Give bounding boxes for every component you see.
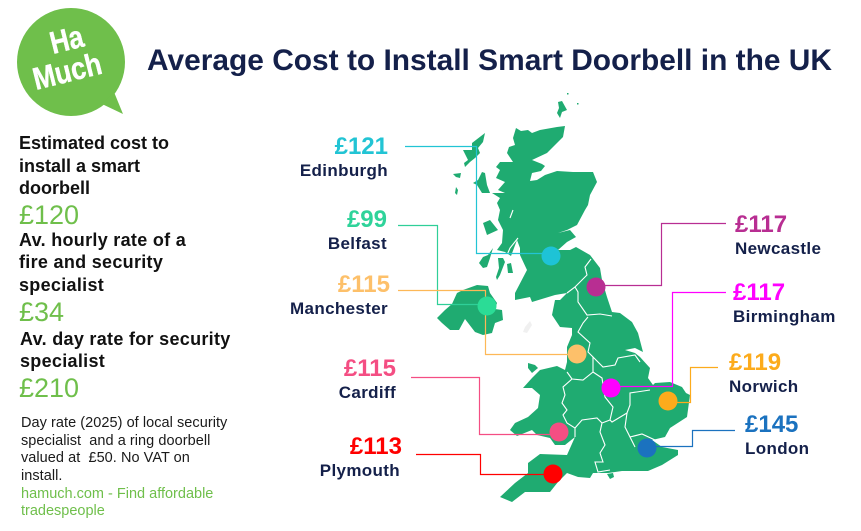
map: Northern Ireland [437,285,503,335]
text: footnote: valued at £50. No VAT on [21,450,190,466]
text: day rate value: £210 [19,373,79,403]
text: footnote: Day rate (2025) of local security [21,415,227,431]
label: Newcastle: £117 [735,211,787,238]
connector: London [652,430,735,446]
panel: cost summary [19,133,231,519]
label: Birmingham [733,279,836,326]
connector: Belfast [398,226,482,304]
text: hourly rate heading: Av. hourly rate of a [19,230,186,250]
text: footnote: specialist and a ring doorbell [21,433,210,449]
text: day rate heading: Av. day rate for security [20,329,231,349]
label: Newcastle: Newcastle [735,239,821,258]
label: Birmingham: £117 [733,279,785,306]
label: Edinburgh: £121 [335,133,388,160]
connector: Newcastle [600,224,726,286]
label: Norwich: £119 [729,349,781,376]
connector: Norwich [672,368,718,402]
logo: HaMuch speech bubble: Ha [46,19,88,61]
text: hourly rate value: £34 [19,297,64,327]
map: Great Britain landmass [492,126,690,502]
label: London: £145 [745,411,798,438]
label: Manchester [290,271,390,318]
label: Cardiff [339,355,396,402]
marker: Newcastle [586,278,606,296]
label: London [745,411,809,458]
connector: Plymouth [416,454,548,474]
label: Cardiff: Cardiff [339,383,396,402]
map: Scottish islands [453,93,614,479]
label: Belfast: Belfast [328,234,387,253]
text: estimated cost heading: install a smart [19,156,140,176]
marker: Norwich [658,392,678,410]
marker: Cardiff [550,422,568,442]
connector: Edinburgh [405,146,545,254]
label: Edinburgh: Edinburgh [300,161,388,180]
marker: Belfast [478,296,496,316]
label: Plymouth [320,433,402,480]
map: Anglesey [528,363,538,373]
label: Manchester: £115 [338,271,390,298]
connector: Birmingham [616,292,726,386]
label: Norwich: Norwich [729,377,799,396]
marker: Edinburgh [542,246,560,266]
text: estimated cost heading: Estimated cost to [19,133,169,153]
label: Manchester: Manchester [290,299,388,318]
label: London: London [745,439,809,458]
map: United Kingdom regions [437,93,690,502]
marker: London [638,438,656,458]
label: Birmingham: Birmingham [733,307,836,326]
marker: Plymouth [544,464,562,484]
marker: Manchester [568,344,586,364]
title: Average Cost to Install Smart Doorbell in the UK [147,44,832,77]
label: Plymouth: £113 [350,433,402,460]
connector: Manchester [398,290,570,354]
label: Belfast: £99 [347,206,387,233]
text: day rate heading: specialist [20,351,105,371]
text: estimated cost value: £120 [19,200,79,230]
marker: Birmingham [602,378,620,398]
label: Edinburgh [300,133,388,180]
text: website link: hamuch.com - Find affordable [21,486,213,502]
text: website link: tradespeople [21,503,105,519]
text: footnote: install. [21,468,62,484]
text: hourly rate heading: specialist [19,275,104,295]
label: Newcastle [735,211,821,258]
map: regional borders [507,210,655,472]
label: Plymouth: Plymouth [320,461,400,480]
logo: HaMuch speech bubble: Much [29,47,105,97]
logo: HaMuch speech bubble [17,8,125,116]
text: hourly rate heading: fire and security [19,252,163,272]
text: estimated cost heading: doorbell [19,178,90,198]
map: Isle of Man [523,321,532,333]
connector: Cardiff [411,378,552,434]
label: Cardiff: £115 [344,355,396,382]
label: Belfast [328,206,387,253]
label: Norwich [729,349,799,396]
